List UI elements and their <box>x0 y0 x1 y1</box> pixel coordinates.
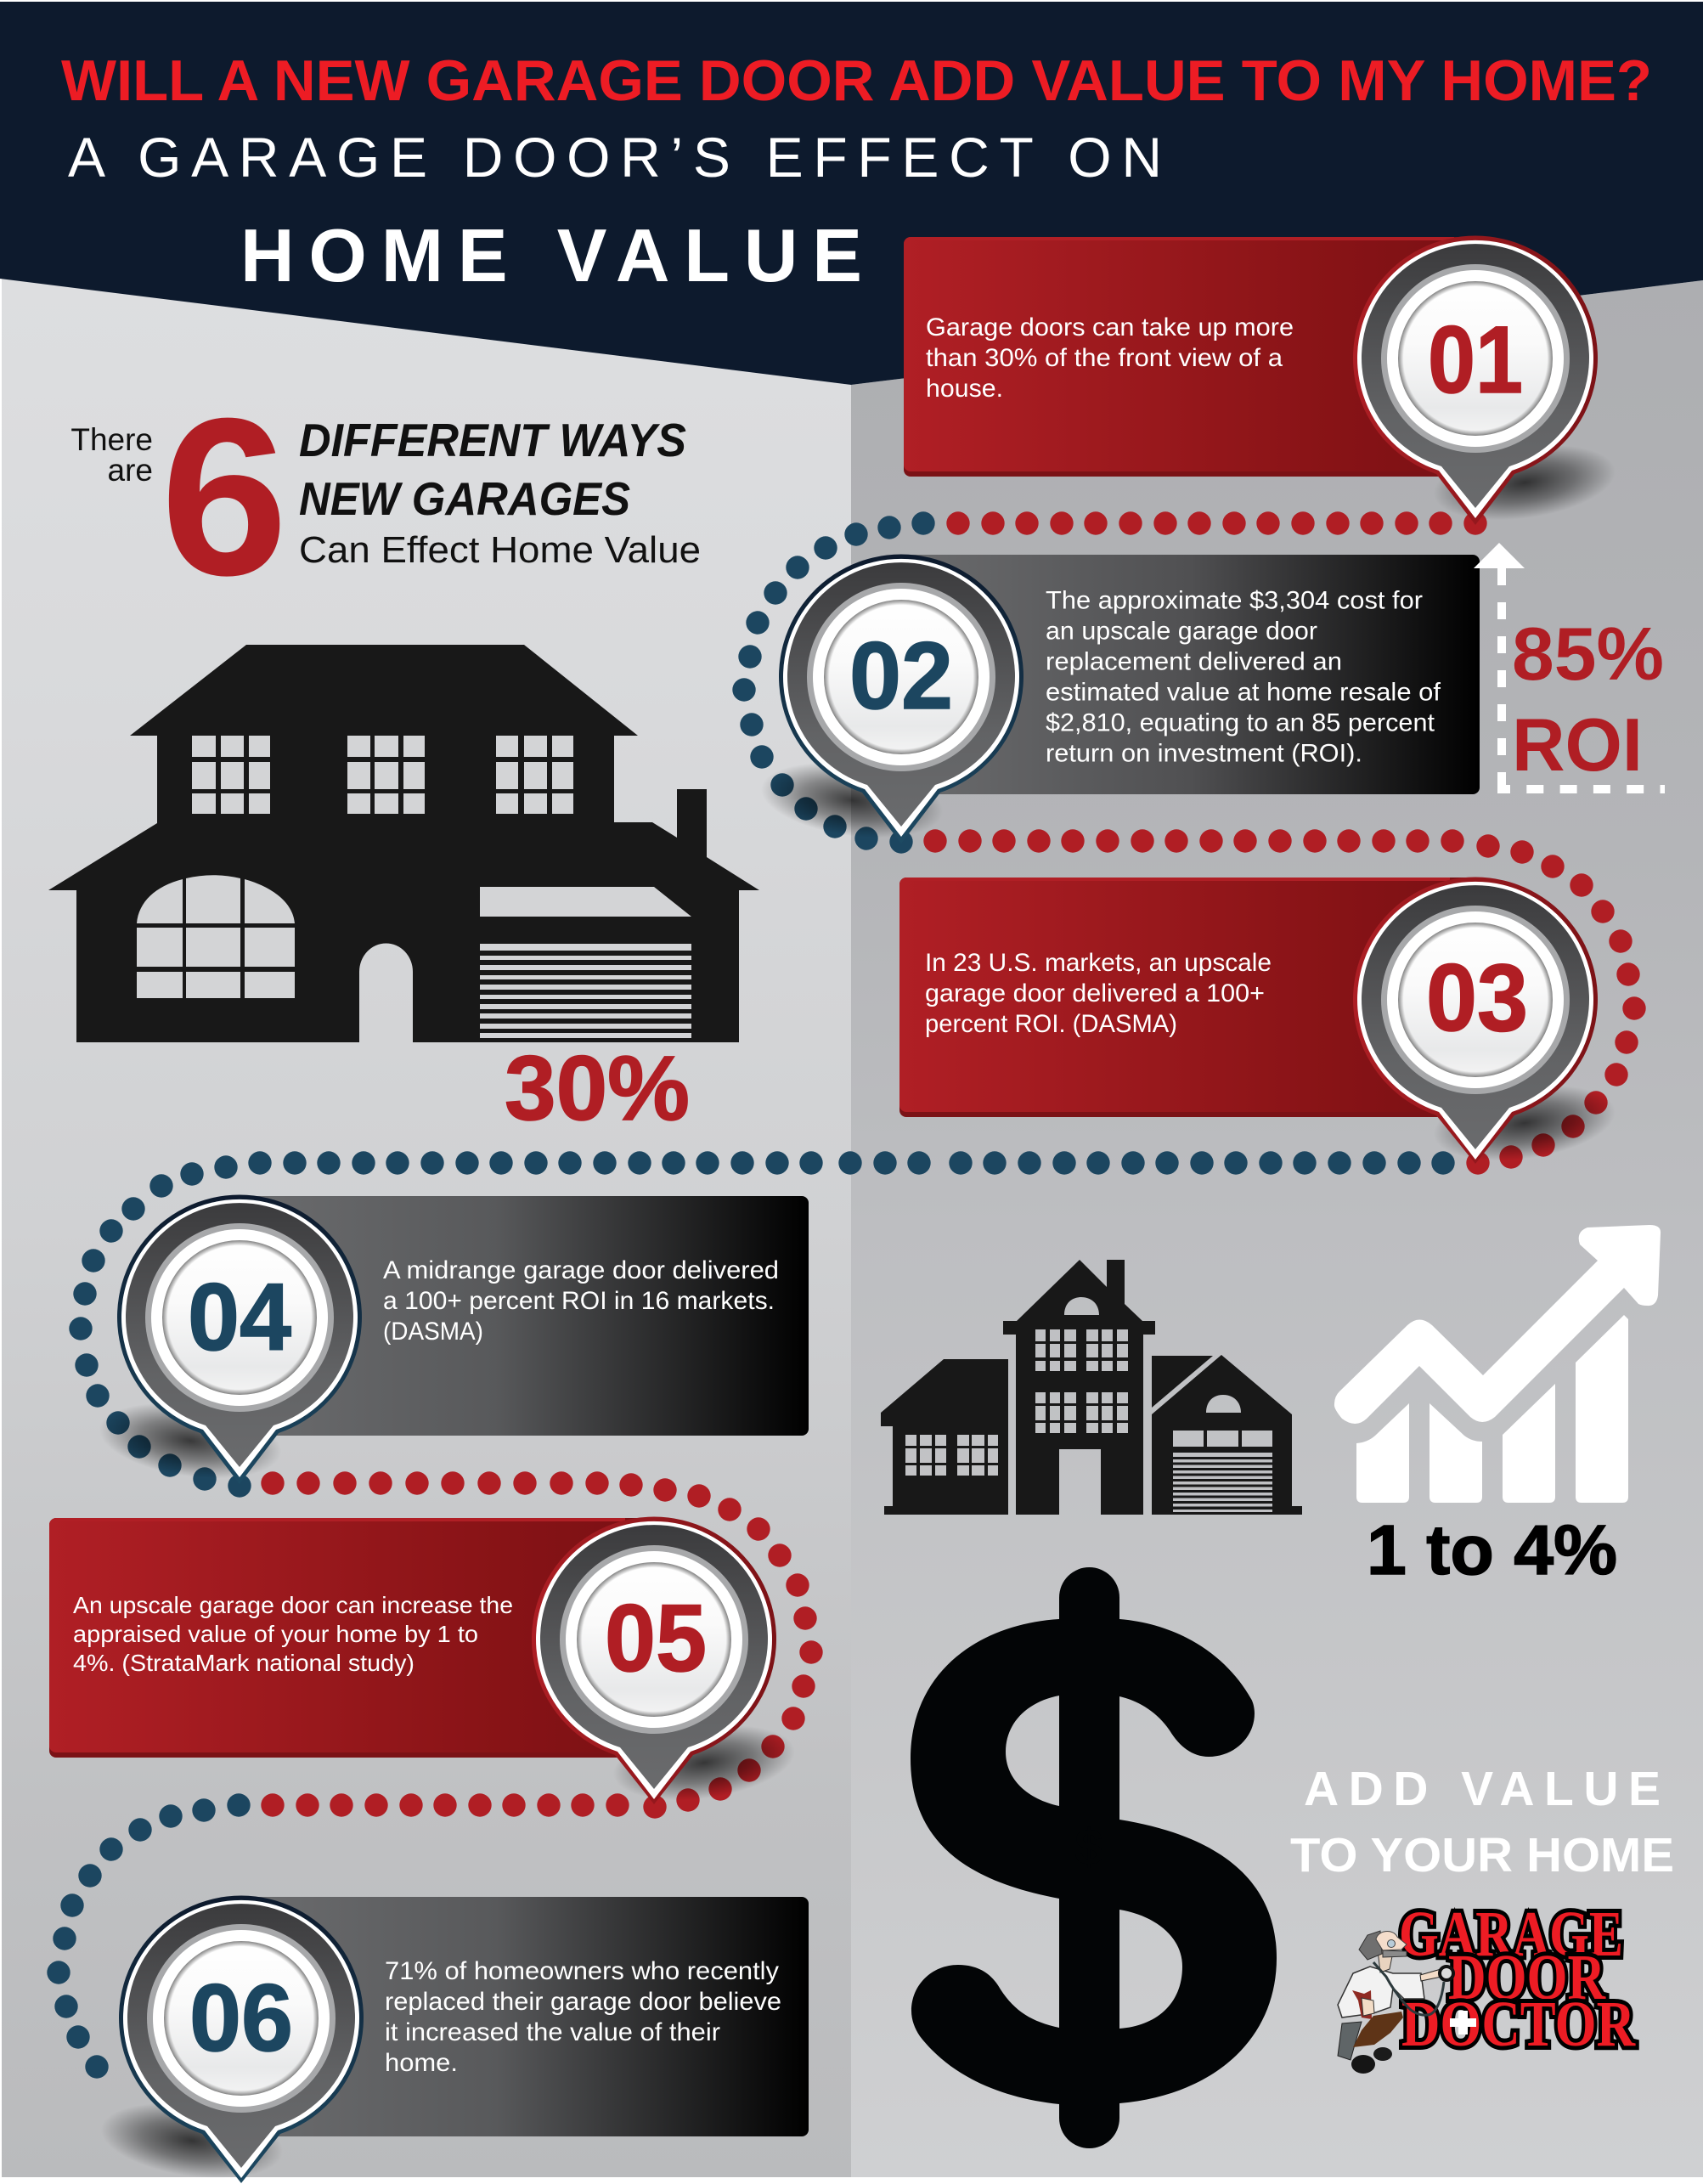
panel: fact 02: The approximate $3,304 cost for <box>1046 586 1423 615</box>
moustache <box>1383 1950 1407 1957</box>
pin 04: 04 <box>188 1264 291 1370</box>
intro text block: 6 <box>161 371 288 622</box>
chart icon: rising arrow and bars <box>1334 1225 1661 1503</box>
dotted path: navy segments <box>47 511 1455 2079</box>
panel: fact 06: replaced their garage door believe <box>385 1988 781 2016</box>
panel: fact 06: home. <box>385 2049 458 2077</box>
panel: fact 02 <box>756 555 1480 849</box>
panel: fact 02: an upscale garage door <box>1046 617 1317 646</box>
pin 03: 03 <box>1426 945 1528 1051</box>
icon: dollar sign <box>911 1567 1277 2148</box>
intro text block: DIFFERENT WAYS <box>299 414 686 466</box>
intro text block: NEW GARAGES <box>299 472 630 525</box>
panel: fact 05: An upscale garage door can increase the <box>73 1592 513 1618</box>
pin 05 <box>532 1517 776 1804</box>
panel: fact 02: $2,810, equating to an 85 percent <box>1046 708 1435 737</box>
panel: fact 04: a 100+ percent ROI in 16 markets. <box>383 1287 775 1315</box>
pin 04 <box>117 1195 362 1484</box>
pin 02: 02 <box>849 623 953 729</box>
panel: fact 06 <box>96 1896 809 2184</box>
logo: Garage Door Doctor <box>1338 1899 1636 2074</box>
header band <box>0 2 1703 385</box>
stethoscope chest piece <box>1440 1967 1453 1980</box>
illustration: house with garage <box>48 645 759 1042</box>
panel: fact 01 <box>904 236 1621 531</box>
logo doctor character <box>1338 1931 1453 2074</box>
neck and face <box>1378 1950 1393 1972</box>
pin 03 <box>1353 878 1598 1164</box>
shoes <box>1373 2047 1392 2061</box>
pin 06: 06 <box>189 1965 293 2071</box>
stat: 1 to 4%: 1 to 4% <box>1367 1510 1617 1589</box>
panel: fact 01: than 30% of the front view of a <box>926 344 1283 372</box>
forearm <box>1420 1968 1444 1981</box>
callout: 85% ROI with dashed arrow <box>1474 543 1665 793</box>
goggle <box>1388 1940 1395 1947</box>
hair <box>1359 1931 1382 1960</box>
title: WILL A NEW GARAGE DOOR ADD VALUE TO MY HOME? <box>61 48 1652 113</box>
pin 01 <box>1353 236 1598 525</box>
panel: fact 02: estimated value at home resale of <box>1046 678 1441 707</box>
panel: fact 04: A midrange garage door delivered <box>383 1256 779 1284</box>
heading: to your home: TO YOUR HOME <box>1290 1828 1674 1882</box>
dotted path: red segments <box>261 511 1646 1819</box>
panel: fact 03 <box>899 878 1621 1171</box>
intro text block: Can Effect Home Value <box>299 529 701 571</box>
book <box>1352 1990 1372 2019</box>
coat <box>1338 1967 1424 2018</box>
front shoe <box>1351 2055 1375 2074</box>
background: left panel <box>2 279 851 2177</box>
logo cross <box>1450 2011 1476 2034</box>
stat: 30%: 30% <box>505 1036 690 1139</box>
intro text block <box>70 371 701 622</box>
pin 02 <box>779 555 1023 844</box>
panel: fact 04: (DASMA) <box>383 1318 483 1346</box>
panel: fact 03: garage door delivered a 100+ <box>925 979 1265 1007</box>
head <box>1376 1932 1407 1950</box>
trousers <box>1353 2012 1403 2047</box>
pin 01: 01 <box>1428 307 1523 413</box>
panel: fact 02: replacement delivered an <box>1046 647 1342 676</box>
pin 06 <box>119 1896 364 2183</box>
illustration: row of houses <box>881 1260 1302 1515</box>
panel: fact 03: percent ROI. (DASMA) <box>925 1010 1177 1038</box>
panel: fact 04 <box>94 1195 809 1489</box>
panel: fact 02: return on investment (ROI). <box>1046 739 1362 768</box>
icon: dollar sign: $ <box>1074 1819 1103 1876</box>
logo wordmark <box>1399 1899 1636 2060</box>
panel: fact 06: 71% of homeowners who recently <box>385 1957 779 1985</box>
logo wordmark: GARAGE <box>1399 1899 1623 1970</box>
logo wordmark: DOCTOR <box>1401 1989 1636 2060</box>
callout: 85% ROI with dashed arrow: ROI <box>1512 703 1643 787</box>
panel: fact 05: 4%. (StrataMark national study) <box>73 1650 414 1676</box>
background: right panel <box>851 280 1703 2177</box>
heading: add value: ADD VALUE <box>1304 1762 1661 1816</box>
intro text block: There <box>70 422 153 457</box>
panel: fact 03: In 23 U.S. markets, an upscale <box>925 949 1272 977</box>
panel: fact 01: Garage doors can take up more <box>926 313 1294 341</box>
logo wordmark: DOOR <box>1448 1942 1606 2013</box>
panel: fact 01: house. <box>926 375 1003 403</box>
panel: fact 05 <box>49 1517 800 1811</box>
pin 05: 05 <box>605 1585 707 1691</box>
callout: 85% ROI with dashed arrow: 85% <box>1512 612 1664 696</box>
stethoscope tube <box>1373 1962 1444 2015</box>
chair and trouser back <box>1338 2022 1362 2060</box>
hand <box>1362 1998 1374 2016</box>
panel: fact 06: it increased the value of their <box>385 2018 720 2046</box>
intro text block: are <box>108 453 153 488</box>
heading: home value: HOME VALUE <box>240 213 862 297</box>
panel: fact 05: appraised value of your home by 1 to <box>73 1621 478 1647</box>
subtitle: A GARAGE DOOR’S EFFECT ON <box>68 126 1162 189</box>
